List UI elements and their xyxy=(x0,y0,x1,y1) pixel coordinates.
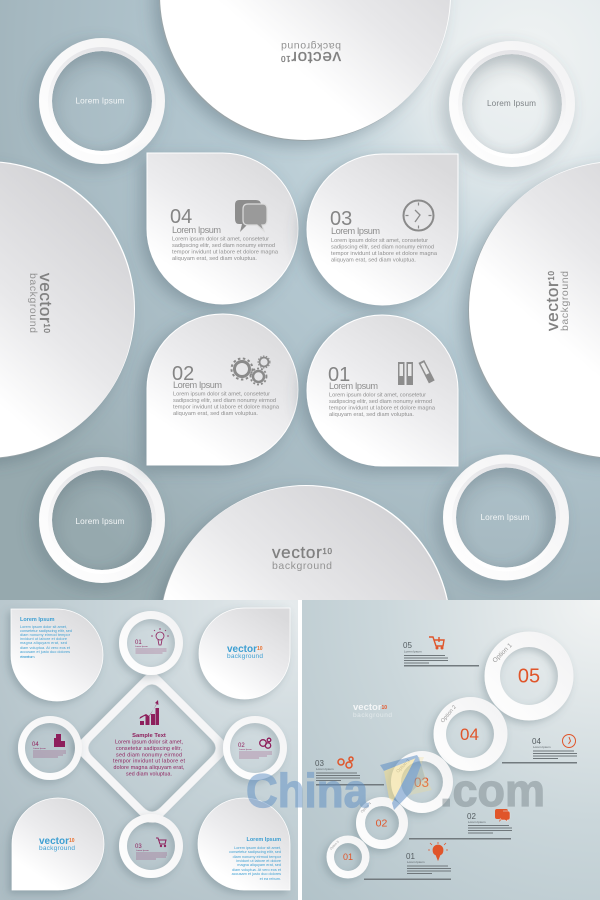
body text: bottom right: magna aliquyam erat, sed xyxy=(237,863,281,867)
vector background label: vector xyxy=(353,702,382,713)
panel: bottom left infographic xyxy=(0,600,298,900)
icon: gears xyxy=(338,757,353,768)
watermark: ChinaZ.com: China xyxy=(246,764,369,817)
rounded diamond frame: Sample Text xyxy=(132,733,166,739)
ring text lines xyxy=(239,752,272,758)
ring 05: Option 1 xyxy=(491,642,514,664)
large circle: top: background xyxy=(281,40,341,52)
ring 02 xyxy=(356,797,408,849)
large circle: right: vector xyxy=(543,281,562,331)
small ring 03: Lorem Ipsum xyxy=(136,849,149,852)
label block 04 xyxy=(502,734,577,764)
large circle: left: 10 xyxy=(42,323,51,334)
label block 01: Lorem Ipsum xyxy=(407,860,425,864)
body text 04: tempor invidunt ut labore et dolore magna xyxy=(172,250,279,256)
card 02: 02 xyxy=(172,363,194,385)
ring: top right xyxy=(449,41,575,167)
text lines xyxy=(407,866,451,874)
small ring 02: Lorem Ipsum xyxy=(239,748,252,751)
label block 03: 03 xyxy=(315,759,324,768)
drop shape: bottom right xyxy=(198,798,290,890)
body text 04: Lorem ipsum dolor sit amet, consetetur xyxy=(172,236,269,242)
label block 05 xyxy=(403,637,479,666)
drop shape: top right xyxy=(199,608,290,699)
ring 02: Option 4 xyxy=(360,801,372,814)
ring 04 xyxy=(434,697,508,771)
body text 03: aliquyam erat, sed diam voluptua. xyxy=(331,258,416,264)
ring 01: Option 5 xyxy=(329,840,340,851)
large circle: bottom xyxy=(154,485,448,600)
ring text lines xyxy=(136,649,166,653)
icon: cart xyxy=(156,838,166,847)
ring 05 xyxy=(484,632,574,720)
card 03: Lorem Ipsum xyxy=(331,226,380,236)
label block 04: 04 xyxy=(532,737,541,746)
underline xyxy=(502,762,577,764)
body text: bottom right: consetetur sadipscing elitr, sed xyxy=(229,850,281,854)
body text: top left xyxy=(20,625,72,659)
drop shape: top right: background xyxy=(227,653,263,660)
watermark: ChinaZ.com xyxy=(246,755,545,817)
vector background label: 10 xyxy=(382,705,387,711)
label block 04: Lorem Ipsum xyxy=(533,745,551,749)
icon: cart xyxy=(429,637,444,649)
large circle: bottom: background xyxy=(272,560,332,572)
icon: gears xyxy=(260,738,271,748)
small ring 04: 04 xyxy=(32,742,39,748)
ring 03 xyxy=(391,751,453,813)
drop shape: top right: 10 xyxy=(257,646,263,652)
body text: bottom right: invidunt ut labore et dolore xyxy=(236,859,281,863)
drop shape: bottom right: Lorem Ipsum xyxy=(246,837,281,843)
panel background xyxy=(0,600,298,900)
body text: top left: consetetur sadipscing elitr, sed xyxy=(20,629,72,633)
panel: top infographic xyxy=(0,0,600,600)
diamond body text: tempor invidunt ut labore et xyxy=(113,758,186,764)
card 03: 03 xyxy=(330,208,352,230)
body text: bottom right: Lorem ipsum dolor sit amet, xyxy=(234,846,281,850)
ring 01: 01 xyxy=(343,852,353,862)
small ring 02: 02 xyxy=(238,743,245,749)
body text 02: sadipscing elitr, sed diam nonumy eirmod xyxy=(173,398,276,404)
small ring 03: 03 xyxy=(135,844,142,850)
ring: bottom left xyxy=(39,457,165,583)
body text: top left: et ea rebum. xyxy=(20,655,35,659)
body text: top left: invidunt ut labore et dolore xyxy=(20,637,67,641)
label block 05: Lorem Ipsum xyxy=(404,650,422,654)
body text 03: Lorem ipsum dolor sit amet, consetetur xyxy=(331,238,428,244)
card 01 xyxy=(307,315,458,466)
text lines xyxy=(316,773,360,780)
underline xyxy=(364,878,451,880)
drop shape: bottom left: background xyxy=(39,845,75,852)
body text: top left: Lorem ipsum dolor sit amet, xyxy=(20,625,67,629)
body text: bottom right: diam voluptua. At vero eos et xyxy=(232,868,282,872)
rounded diamond frame xyxy=(73,669,231,827)
icon: clock xyxy=(562,734,576,748)
large circle: top: vector xyxy=(291,48,341,67)
card 04: Lorem Ipsum xyxy=(172,225,221,235)
label block 05: 05 xyxy=(403,641,412,650)
body text 03: tempor invidunt ut labore et dolore magna xyxy=(331,251,438,257)
large circle: left xyxy=(0,161,135,459)
body text 01 xyxy=(329,392,436,418)
ring 04: 04 xyxy=(460,725,479,744)
body text: bottom right xyxy=(229,846,282,881)
card 01: 01 xyxy=(328,364,350,386)
ring: bottom left: Lorem Ipsum xyxy=(76,517,125,526)
body text: bottom right: accusam et justo duo dolores xyxy=(232,872,281,876)
small ring 01: 01 xyxy=(135,640,142,646)
icon: buildings xyxy=(54,734,65,747)
ring: top left xyxy=(39,38,165,164)
label block 02 xyxy=(409,809,512,840)
card 02: Lorem Ipsum xyxy=(173,380,222,390)
large circle: top: 10 xyxy=(280,54,291,63)
card 04 xyxy=(147,153,298,304)
small ring 04: Lorem Ipsum xyxy=(33,747,46,750)
diamond body text: sed diam nonumy eirmod xyxy=(116,752,182,758)
card 02 xyxy=(147,314,298,465)
panel background xyxy=(0,0,600,600)
drop shape: top left xyxy=(11,609,103,701)
small ring 03 xyxy=(119,814,183,878)
large circle: left: vector xyxy=(36,273,55,323)
body text 01: Lorem ipsum dolor sit amet, consetetur xyxy=(329,392,426,398)
label block 01: 01 xyxy=(406,852,415,861)
body text 01: sadipscing elitr, sed diam nonumy eirmod xyxy=(329,399,432,405)
label block 02: 02 xyxy=(467,812,476,821)
drop shape: bottom left: 10 xyxy=(69,838,75,844)
body text 02: aliquyam erat, sed diam voluptua. xyxy=(173,411,258,417)
underline xyxy=(409,838,511,840)
drop shape: bottom left: vector xyxy=(39,836,69,847)
body text 04 xyxy=(172,236,279,262)
diamond body text: dolore magna aliquyam erat, xyxy=(114,765,184,771)
vector background label xyxy=(353,702,392,719)
diamond body text: Lorem ipsum dolor sit amet, xyxy=(115,740,183,746)
large circle: top xyxy=(159,0,451,141)
ring 02: 02 xyxy=(376,818,387,830)
icon: clock xyxy=(404,200,434,230)
body text 03 xyxy=(331,238,438,264)
small ring 01 xyxy=(119,611,183,675)
body text 04: aliquyam erat, sed diam voluptua. xyxy=(172,256,257,262)
ring: top left: Lorem Ipsum xyxy=(76,96,125,106)
small ring 04 xyxy=(18,716,82,780)
ring 05: 05 xyxy=(518,666,540,688)
ring: top right: Lorem Ipsum xyxy=(487,99,536,108)
drop shape: top right: vector xyxy=(227,644,257,655)
large circle: right: 10 xyxy=(547,270,556,281)
panel background xyxy=(302,600,600,900)
body text 02: Lorem ipsum dolor sit amet, consetetur xyxy=(173,392,270,398)
watermark Z logo xyxy=(380,755,432,810)
diamond body text: consetetur sadipscing elitr, xyxy=(116,746,182,752)
drop shape: top left: Lorem Ipsum xyxy=(20,617,55,623)
vector background label: background xyxy=(353,712,392,719)
body text 01: aliquyam erat, sed diam voluptua. xyxy=(329,412,414,418)
text lines xyxy=(404,656,448,663)
text lines xyxy=(533,751,577,758)
small ring 02 xyxy=(223,716,287,780)
icon: speech bubbles xyxy=(495,809,510,822)
card 04: 04 xyxy=(170,206,192,228)
body text 04: sadipscing elitr, sed diam nonumy eirmod xyxy=(172,243,275,249)
large circle: bottom: vector xyxy=(272,543,322,562)
icon: chart xyxy=(140,700,159,725)
large circle: right: background xyxy=(559,271,571,331)
underline xyxy=(316,784,384,786)
watermark: ChinaZ.com: .com xyxy=(440,765,545,816)
ring: bottom right: Lorem Ipsum xyxy=(480,513,530,522)
ring 01 xyxy=(326,836,370,878)
drop shape: bottom left xyxy=(12,798,104,890)
icon: bulb xyxy=(151,628,169,645)
ring 03: Option 3 xyxy=(395,758,411,774)
panel: bottom right infographic xyxy=(302,600,600,900)
body text: bottom right: et ea rebum. xyxy=(260,877,281,881)
body text: bottom right: diam nonumy eirmod tempor xyxy=(233,855,282,859)
text lines xyxy=(468,826,512,833)
icon: bulb xyxy=(428,842,448,860)
ring text lines xyxy=(33,751,66,757)
ring: bottom right xyxy=(443,454,569,580)
small ring 01: Lorem Ipsum xyxy=(135,645,148,648)
body text: top left: magna aliquyam erat, sed xyxy=(20,641,67,645)
body text 02: tempor invidunt ut labore et dolore magna xyxy=(173,404,280,410)
card 01: Lorem Ipsum xyxy=(329,381,378,391)
label block 02: Lorem Ipsum xyxy=(468,820,486,824)
icon: speech bubbles xyxy=(235,200,267,232)
body text: top left: diam voluptua. At vero eos et xyxy=(20,646,71,650)
card 03 xyxy=(307,154,458,305)
large circle: bottom: 10 xyxy=(322,547,333,556)
ring text lines xyxy=(136,853,167,859)
diamond body text xyxy=(113,740,186,778)
underline xyxy=(404,665,479,666)
label block 01 xyxy=(364,842,451,880)
body text 02 xyxy=(173,392,280,417)
label block 03: Lorem Ipsum xyxy=(316,767,334,771)
large circle: right xyxy=(468,161,600,459)
ring 04: Option 2 xyxy=(440,704,458,724)
label block 03 xyxy=(315,757,384,786)
large circle: left: background xyxy=(27,273,39,333)
body text 03: sadipscing elitr, sed diam nonumy eirmod xyxy=(331,244,434,250)
diamond body text: sed diam voluptua. xyxy=(126,772,172,778)
icon: gears xyxy=(232,356,270,384)
body text: top left: diam nonumy eirmod tempor xyxy=(20,633,71,637)
icon: binders xyxy=(398,360,435,385)
body text 01: tempor invidunt ut labore et dolore magna xyxy=(329,406,436,412)
body text: top left: accusam et justo duo dolores xyxy=(20,650,70,654)
ring 03: 03 xyxy=(414,775,429,790)
